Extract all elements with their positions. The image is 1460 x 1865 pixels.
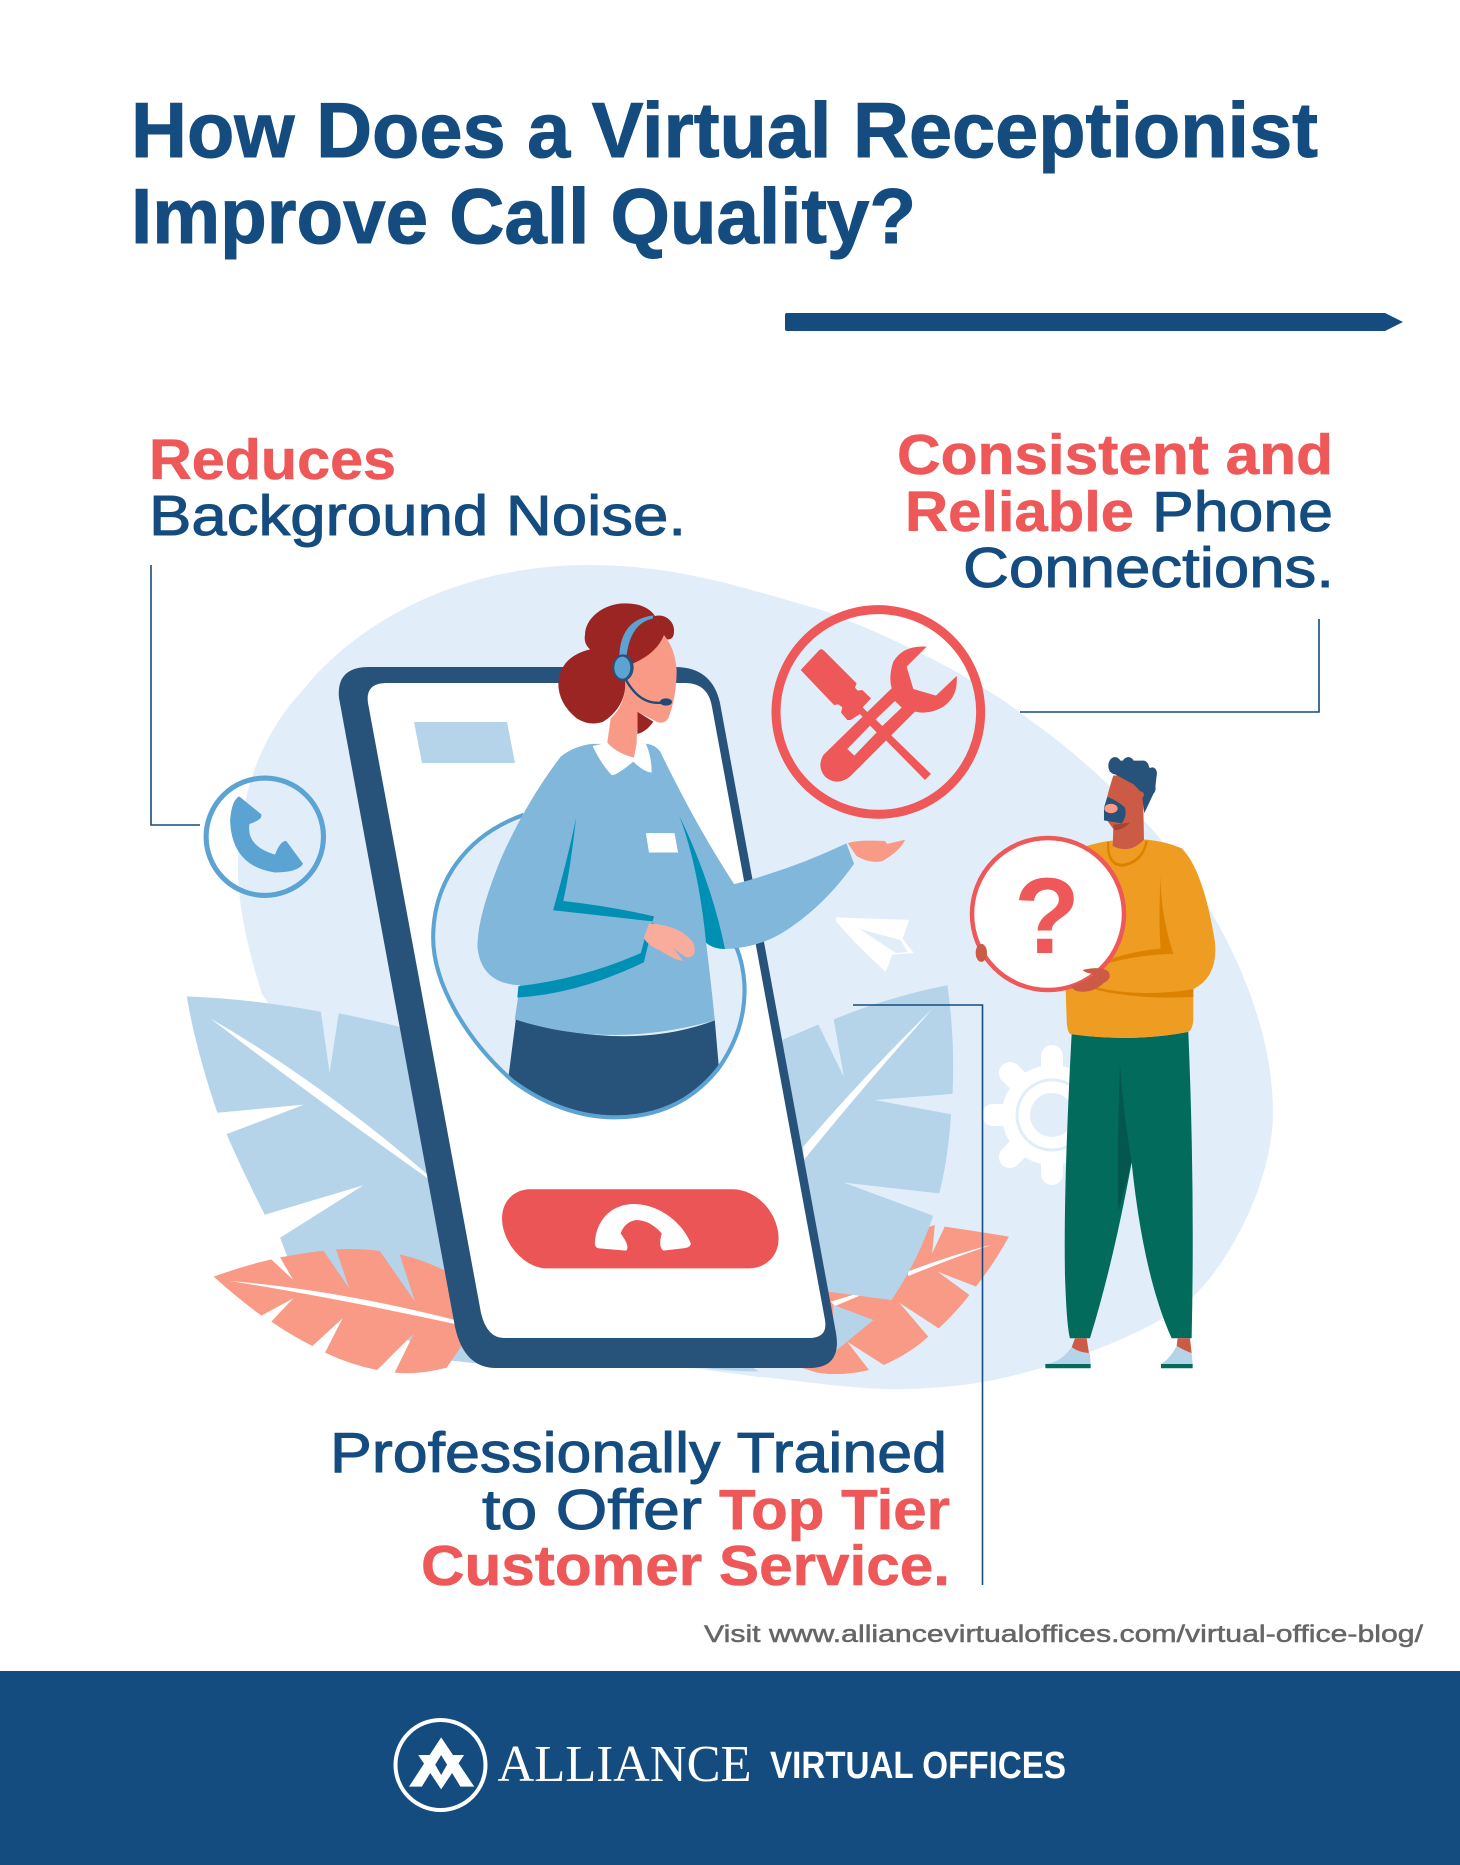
man holding question mark xyxy=(972,757,1215,1368)
heading: professionally trained: to Offer xyxy=(482,1478,702,1541)
heading: consistent and reliable phone connections: Phone xyxy=(1152,480,1333,543)
heading: consistent and reliable phone connections: Connections. xyxy=(963,536,1334,599)
connector line: customer service xyxy=(853,1005,982,1585)
screwdriver xyxy=(801,649,931,780)
chin shadow xyxy=(637,712,653,734)
icon: red hang-up button xyxy=(502,1189,779,1268)
paper plane xyxy=(836,917,914,972)
name tag xyxy=(646,833,678,853)
icon: gear xyxy=(993,1056,1111,1174)
connector line: reliable connections xyxy=(1020,619,1319,712)
icon: phone circle xyxy=(206,778,323,895)
right coral leaf xyxy=(798,1225,1009,1374)
heading: consistent and reliable phone connections xyxy=(897,423,1334,599)
sweater xyxy=(1066,839,1215,1038)
feet xyxy=(1072,1338,1192,1353)
heading: consistent and reliable phone connections: Reliable xyxy=(905,480,1134,543)
background blob xyxy=(238,565,1273,1389)
phone xyxy=(339,667,837,1368)
man's hands xyxy=(976,944,1110,992)
hair and beard xyxy=(1104,757,1157,823)
jacket teal folds xyxy=(517,815,725,997)
bubble outline xyxy=(433,815,745,1117)
title: How Does a Virtual Receptionist xyxy=(131,86,1318,174)
title xyxy=(131,86,1318,260)
title: Improve Call Quality? xyxy=(131,172,916,260)
wordmark virtual offices: VIRTUAL OFFICES xyxy=(770,1745,1066,1787)
hair xyxy=(558,603,674,724)
heading: professionally trained: Professionally Trained xyxy=(330,1421,947,1484)
icon: tools circle xyxy=(776,610,981,814)
wrench xyxy=(820,647,957,782)
headset xyxy=(612,615,672,706)
face and neck xyxy=(607,635,677,758)
heading: reduces background noise: Reduces xyxy=(149,428,396,491)
right hand xyxy=(848,840,905,862)
heading: professionally trained: Customer Service. xyxy=(421,1534,950,1597)
left coral leaf xyxy=(214,1249,873,1373)
left big blue leaf xyxy=(187,996,759,1371)
jacket xyxy=(478,744,854,1035)
shoes xyxy=(1045,1346,1193,1364)
left hand xyxy=(644,923,695,961)
trousers xyxy=(1065,1032,1193,1338)
collar xyxy=(593,743,652,775)
heading: reduces background noise xyxy=(149,428,686,547)
phone screen label block xyxy=(414,722,515,763)
heading: reduces background noise: Background Noise. xyxy=(149,484,686,547)
wordmark alliance: ALLIANCE xyxy=(498,1736,752,1793)
question mark disc: ? xyxy=(1014,855,1080,976)
source url: Visit www.alliancevirtualoffices.com/virtual-office-blog/ xyxy=(704,1621,1423,1648)
head and neck xyxy=(1104,776,1155,849)
arrow bar under title xyxy=(785,313,1403,331)
connector line: reduces background noise xyxy=(151,565,200,825)
heading: professionally trained xyxy=(330,1421,950,1597)
woman receptionist xyxy=(433,603,905,1127)
footer band xyxy=(0,1671,1460,1865)
logo mark xyxy=(396,1720,486,1810)
question mark disc xyxy=(972,838,1124,990)
skirt xyxy=(508,1020,719,1116)
heading: professionally trained: Top Tier xyxy=(719,1478,950,1541)
bubble behind woman xyxy=(433,815,745,1117)
footer logo xyxy=(396,1720,1066,1810)
heading: consistent and reliable phone connections: Consistent and xyxy=(897,423,1333,486)
right big blue leaf xyxy=(752,985,953,1300)
